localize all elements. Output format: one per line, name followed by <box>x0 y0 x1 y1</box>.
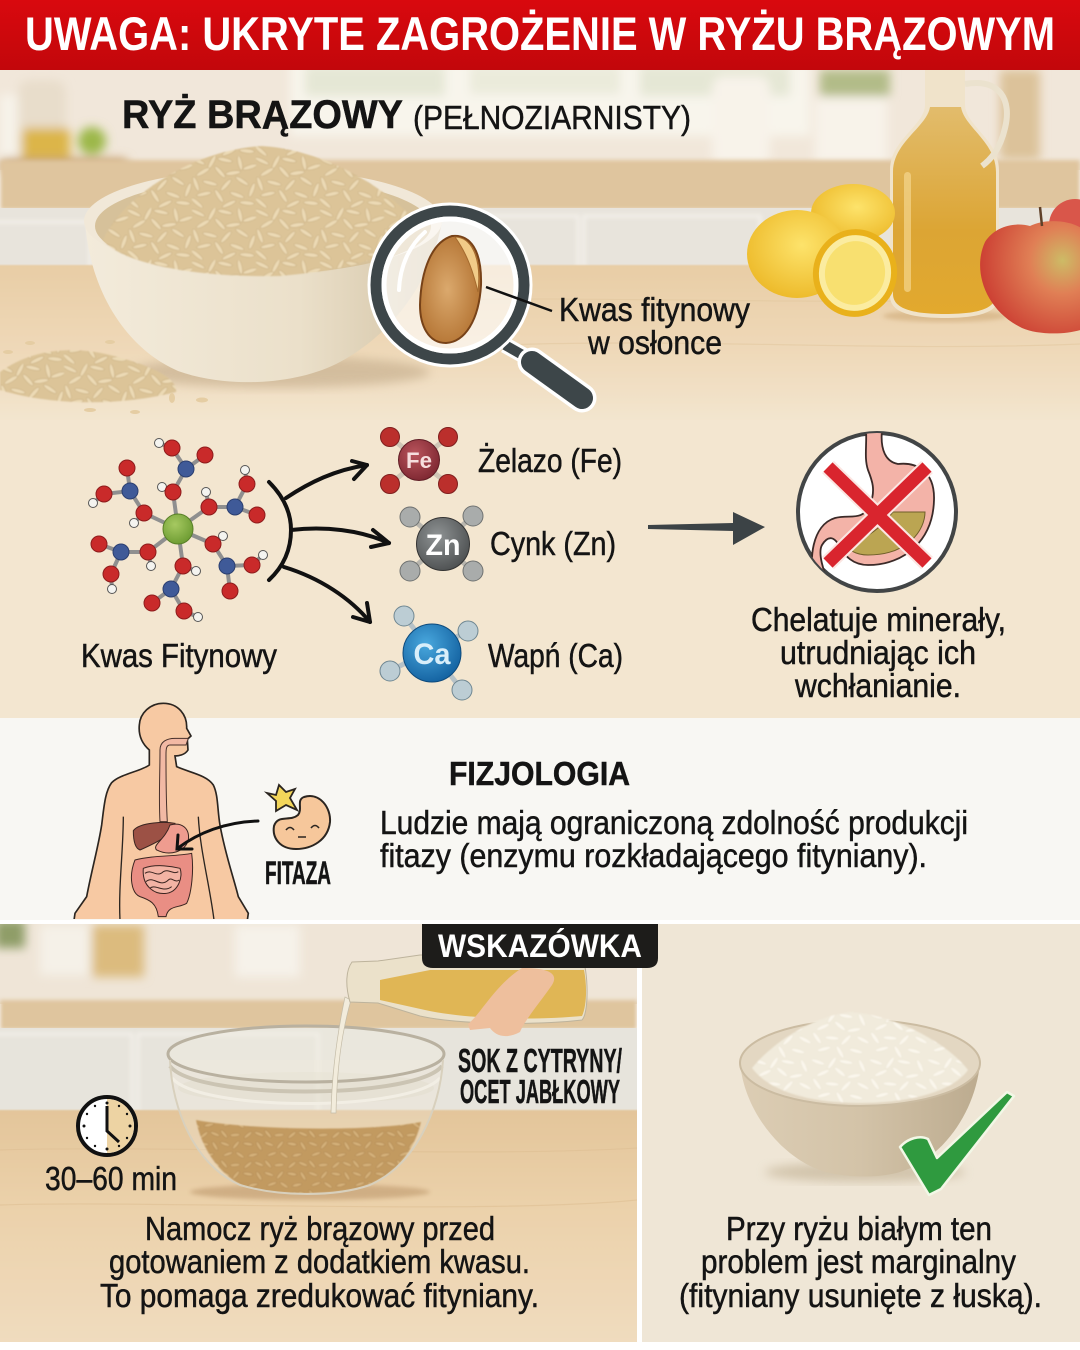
illustration: bowl of white rice <box>740 1012 980 1182</box>
text: physiology body <box>380 804 968 874</box>
icon: magnifying glass with grain <box>369 204 582 398</box>
heading: physiology: FIZJOLOGIA <box>449 755 630 792</box>
text: white rice note <box>679 1210 1042 1314</box>
text: soaking advice <box>100 1210 539 1314</box>
text: chelation explanation: wchłanianie. <box>794 667 961 704</box>
label: phytase: FITAZA <box>265 855 331 891</box>
icon: calcium atom: Ca <box>414 638 451 671</box>
illustration: bottle and hand pouring <box>331 955 587 1113</box>
arrows: chelation to minerals <box>269 461 389 622</box>
panel: tip soaking rice <box>0 920 650 1350</box>
kitchen background <box>0 920 650 1350</box>
title: brown rice: RYŻ BRĄZOWY <box>122 93 403 137</box>
title: brown rice: (PEŁNOZIARNISTY) <box>413 99 691 136</box>
text: chelation explanation: Chelatuje minerały, <box>751 601 1006 638</box>
label: soaking time: 30–60 min <box>45 1160 177 1197</box>
illustration: bowl of brown rice <box>84 146 442 388</box>
title: brown rice <box>122 93 691 137</box>
arrow: enzyme to stomach <box>177 821 258 849</box>
icon: iron atom: Fe <box>406 448 432 473</box>
label: lemon juice or apple vinegar: OCET JABŁKOWY <box>460 1073 620 1110</box>
kitchen background <box>0 60 1080 425</box>
text: physiology body: fitazy (enzymu rozkładającego fityniany). <box>380 837 927 874</box>
text: physiology body: Ludzie mają ograniczoną zdolność produkcji <box>380 804 968 841</box>
text: chelation explanation: utrudniając ich <box>780 634 976 671</box>
callout: phytic acid in the hull <box>486 287 750 361</box>
illustration: glass bowl with rice <box>168 1026 444 1200</box>
label: lemon juice or apple vinegar: SOK Z CYTRYNY/ <box>458 1042 622 1079</box>
text: soaking advice: To pomaga zredukować fityniany. <box>100 1277 539 1314</box>
arrow: to absorption block <box>648 512 765 545</box>
icon: iron atom <box>380 428 458 494</box>
label: calcium: Wapń (Ca) <box>488 637 623 674</box>
panel background <box>642 924 1080 1342</box>
label: lemon juice or apple vinegar <box>458 1048 622 1104</box>
badge: tip: WSKAZÓWKA <box>438 928 642 964</box>
lower cream background <box>0 420 1080 718</box>
icon: zinc atom <box>400 506 483 581</box>
text: chelation explanation <box>752 606 1004 698</box>
label: zinc: Cynk (Zn) <box>490 525 616 562</box>
text: white rice note: Przy ryżu białym ten <box>726 1210 992 1247</box>
icon: calcium atom <box>380 606 478 700</box>
diagram: phytic acid molecule <box>88 438 268 622</box>
icon: clock <box>78 1097 136 1155</box>
illustration: human digestive system <box>73 703 248 925</box>
text: white rice note: (fityniany usunięte z łuską). <box>679 1277 1042 1314</box>
panel: white rice <box>642 924 1080 1342</box>
text: white rice note: problem jest marginalny <box>701 1243 1016 1280</box>
label: iron: Żelazo (Fe) <box>478 442 622 479</box>
icon: phytase enzyme <box>267 785 330 849</box>
illustration: apple <box>980 199 1080 333</box>
text: soaking advice: Namocz ryż brązowy przed <box>145 1210 495 1247</box>
panel: brown rice kitchen scene <box>0 60 1080 718</box>
illustration: spilled rice <box>0 340 208 414</box>
icon: green check mark <box>900 1092 1014 1195</box>
text: soaking advice: gotowaniem z dodatkiem kwasu. <box>109 1243 530 1280</box>
illustration: lemons <box>747 184 897 317</box>
label: phytic acid: Kwas Fitynowy <box>81 637 277 674</box>
callout: phytic acid in the hull: w osłonce <box>587 324 722 361</box>
panel: physiology <box>0 703 1080 925</box>
icon: zinc atom: Zn <box>426 529 460 562</box>
icon: stomach crossed out <box>798 430 956 591</box>
callout: phytic acid in the hull: Kwas fitynowy <box>559 291 750 328</box>
panel background <box>0 718 1080 920</box>
illustration: oil bottle <box>883 70 1007 322</box>
